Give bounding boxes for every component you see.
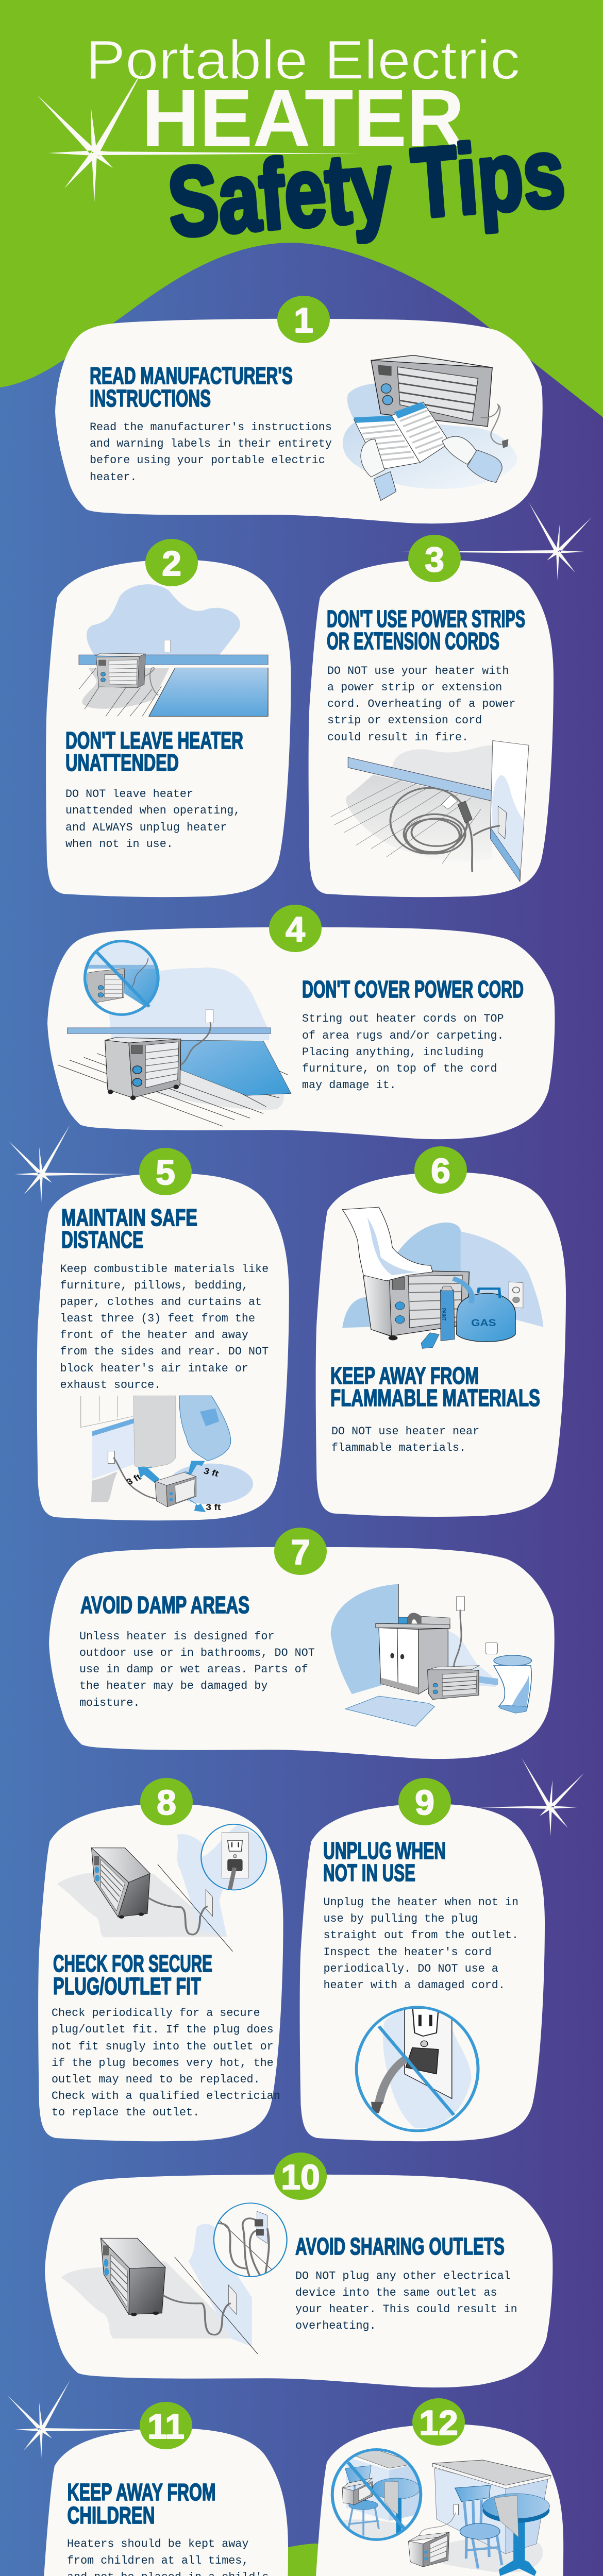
heading: AVOID SHARING OUTLETS xyxy=(295,2233,505,2260)
body text: Heaters should be kept away xyxy=(67,2538,248,2550)
illustration: coiled extension cord at outlet xyxy=(331,741,529,882)
illustration: cord under rug xyxy=(58,941,291,1126)
number badge 10: 10 xyxy=(281,2158,320,2197)
body text: to replace the outlet. xyxy=(52,2106,199,2119)
heading xyxy=(65,727,243,776)
number badge 4 xyxy=(269,905,322,952)
heading: UNATTENDED xyxy=(65,749,179,776)
card xyxy=(300,1804,545,2141)
panel: 2 don't leave heater unattended xyxy=(46,539,291,897)
panel: 3 don't use power strips xyxy=(309,535,554,897)
panel: 11 keep away from children xyxy=(43,2402,288,2576)
number badge 8 xyxy=(140,1778,193,1825)
body text: the heater may be damaged by xyxy=(79,1680,267,1692)
illustration: pulling plug by cord, crossed out xyxy=(357,2005,478,2131)
heading xyxy=(61,1204,197,1253)
number badge 6: 6 xyxy=(431,1151,450,1191)
title xyxy=(86,29,568,258)
body text: moisture. xyxy=(79,1697,140,1709)
illustration: chair, table and heater on floor xyxy=(332,2449,551,2576)
number badge 12: 12 xyxy=(419,2403,458,2443)
body text: from children at all times, xyxy=(67,2554,248,2567)
card xyxy=(309,560,554,897)
body text: device into the same outlet as xyxy=(295,2286,497,2299)
panel: 9 unplug when not in use xyxy=(300,1778,545,2141)
number badge 3 xyxy=(408,535,461,582)
body text: outlet may need to be replaced. xyxy=(52,2073,260,2086)
heading: DISTANCE xyxy=(61,1226,143,1253)
body text: DO NOT use your heater with xyxy=(327,665,509,677)
body text: paper, clothes and curtains at xyxy=(60,1296,262,1309)
body text: a power strip or extension xyxy=(327,681,502,694)
heading xyxy=(327,605,525,654)
body text: when not in use. xyxy=(65,838,173,851)
heading xyxy=(67,2479,215,2529)
number badge 11: 11 xyxy=(147,2407,185,2446)
body text: Inspect the heater's cord xyxy=(324,1946,492,1959)
body text: DO NOT use heater near xyxy=(331,1425,479,1438)
body text: could result in fire. xyxy=(327,731,468,744)
body text: block heater's air intake or xyxy=(60,1362,248,1375)
title line: Portable Electric: Portable Electric xyxy=(86,29,520,91)
body text: outdoor use or in bathrooms, DO NOT xyxy=(79,1647,315,1659)
card xyxy=(38,1804,283,2141)
body text: straight out from the outlet. xyxy=(324,1929,518,1942)
number badge 8: 8 xyxy=(157,1783,176,1822)
panel: 12 place heater on flat surface xyxy=(315,2398,563,2576)
card xyxy=(316,1172,566,1517)
body text: use in damp or wet areas. Parts of xyxy=(79,1663,308,1676)
background: lower green wave xyxy=(0,2544,603,2576)
body text: before using your portable electric xyxy=(90,454,325,467)
number badge 7: 7 xyxy=(291,1533,310,1572)
heading: KEEP AWAY FROM xyxy=(67,2479,215,2505)
number badge 5 xyxy=(139,1148,192,1195)
card xyxy=(46,560,291,897)
body text: and warning labels in their entirety xyxy=(90,437,332,450)
body text: may damage it. xyxy=(302,1079,396,1092)
heading: UNPLUG WHEN xyxy=(323,1837,446,1864)
body text: Check with a qualified electrician xyxy=(52,2090,280,2103)
body text: from the sides and rear. DO NOT xyxy=(60,1345,269,1358)
number badge 2 xyxy=(145,539,198,586)
illustration: curtain, paint and gas near heater: PAINT xyxy=(441,1308,447,1321)
body text: heater with a damaged cord. xyxy=(324,1979,505,1992)
number badge 2: 2 xyxy=(162,544,181,583)
number badge 4: 4 xyxy=(286,910,305,949)
number badge 7 xyxy=(274,1528,327,1575)
panel: 10 avoid sharing outlets xyxy=(45,2153,552,2387)
illustration: curtain, paint and gas near heater xyxy=(342,1207,543,1348)
illustration: three-foot clearance around heater: 3 ft xyxy=(206,1502,221,1512)
heading: NOT IN USE xyxy=(323,1859,415,1886)
body text: Placing anything, including xyxy=(302,1046,483,1059)
card xyxy=(45,2175,552,2387)
body text: Unplug the heater when not in xyxy=(324,1896,518,1909)
sparkle: left of card 5 xyxy=(8,1125,129,1203)
body text: not fit snugly into the outlet or xyxy=(52,2040,274,2053)
body text: overheating. xyxy=(295,2319,376,2332)
card xyxy=(43,2428,288,2576)
body text: Keep combustible materials like xyxy=(60,1263,269,1276)
body text: periodically. DO NOT use a xyxy=(324,1962,498,1975)
body text: DO NOT leave heater xyxy=(65,788,193,801)
body text: if the plug becomes very hot, the xyxy=(52,2057,274,2070)
heading: CHECK FOR SECURE xyxy=(53,1950,212,1977)
number badge 12 xyxy=(412,2398,465,2446)
heading: DON'T LEAVE HEATER xyxy=(65,727,243,754)
body text: unattended when operating, xyxy=(65,804,240,817)
panel: 6 keep away from flammable materials xyxy=(316,1146,566,1517)
body text: Read the manufacturer's instructions xyxy=(90,421,332,434)
body text: furniture, pillows, bedding, xyxy=(60,1279,248,1292)
number badge 3: 3 xyxy=(425,540,444,579)
title line: HEATER: HEATER xyxy=(142,73,464,163)
illustration: three-foot clearance around heater: 3 ft xyxy=(124,1472,143,1487)
body text: exhaust source. xyxy=(60,1379,161,1392)
illustration: three-foot clearance around heater xyxy=(81,1396,253,1512)
heading: MAINTAIN SAFE xyxy=(61,1204,197,1231)
card xyxy=(315,2424,563,2576)
heading xyxy=(90,362,293,412)
panel: 5 maintain safe distance xyxy=(37,1148,289,1520)
card xyxy=(49,1547,555,1759)
body text: your heater. This could result in xyxy=(295,2303,517,2316)
number badge 5: 5 xyxy=(156,1153,175,1192)
number badge 6 xyxy=(414,1146,467,1194)
panel: 1 read manufacturer's instructions xyxy=(55,296,543,523)
number badge 9 xyxy=(398,1778,451,1825)
body text: Check periodically for a secure xyxy=(52,2007,260,2020)
illustration: bathroom with heater xyxy=(331,1584,531,1726)
body text: heater. xyxy=(90,471,137,484)
sparkle: title xyxy=(37,68,361,202)
panel: 4 don't cover power cord xyxy=(47,905,555,1139)
card xyxy=(37,1173,289,1520)
illustration: three-foot clearance around heater: 3 ft xyxy=(203,1466,220,1479)
heading xyxy=(330,1362,540,1411)
body text: plug/outlet fit. If the plug does xyxy=(52,2023,274,2036)
sparkle: right of card 9 xyxy=(478,1758,584,1836)
heading: INSTRUCTIONS xyxy=(90,385,211,412)
number badge 10 xyxy=(274,2153,327,2200)
body text: front of the heater and away xyxy=(60,1329,248,1342)
illustration: heater plugged into outlet with inset xyxy=(57,1824,267,1952)
body text: String out heater cords on TOP xyxy=(302,1012,504,1025)
illustration: reading manual beside heater xyxy=(343,355,517,501)
heading xyxy=(53,1950,212,1999)
heading: OR EXTENSION CORDS xyxy=(327,628,499,654)
body text: cord. Overheating of a power xyxy=(327,698,515,710)
sparkle: left of card 11 xyxy=(8,2380,149,2459)
illustration: heater with shared outlet inset xyxy=(61,2203,287,2354)
sparkle: top right xyxy=(400,502,591,581)
heading: READ MANUFACTURER'S xyxy=(90,362,293,389)
body text: use by pulling the plug xyxy=(324,1912,478,1925)
illustration: heater on floor next to rug xyxy=(79,584,268,716)
heading xyxy=(323,1837,446,1886)
number badge 11 xyxy=(140,2402,192,2449)
body text: flammable materials. xyxy=(331,1442,466,1454)
illustration: curtain, paint and gas near heater: GAS xyxy=(471,1317,496,1329)
panel: 8 check for secure plug/outlet fit xyxy=(38,1778,283,2141)
card xyxy=(47,927,555,1139)
number badge 9: 9 xyxy=(415,1783,434,1822)
card xyxy=(55,319,543,523)
number badge 1 xyxy=(277,296,330,343)
heading: AVOID DAMP AREAS xyxy=(80,1591,249,1618)
body text: least three (3) feet from the xyxy=(60,1312,255,1325)
body text: Unless heater is designed for xyxy=(79,1630,275,1643)
body text: DO NOT plug any other electrical xyxy=(295,2270,511,2282)
body text: and ALWAYS unplug heater xyxy=(65,821,227,834)
heading: KEEP AWAY FROM xyxy=(330,1362,479,1389)
heading: CHILDREN xyxy=(67,2502,155,2529)
body text: strip or extension cord xyxy=(327,714,482,727)
number badge 1: 1 xyxy=(294,301,313,340)
body text: furniture, on top of the cord xyxy=(302,1062,497,1075)
panel: 7 avoid damp areas xyxy=(49,1528,555,1759)
heading: PLUG/OUTLET FIT xyxy=(53,1973,201,1999)
body text: of area rugs and/or carpeting. xyxy=(302,1029,504,1042)
